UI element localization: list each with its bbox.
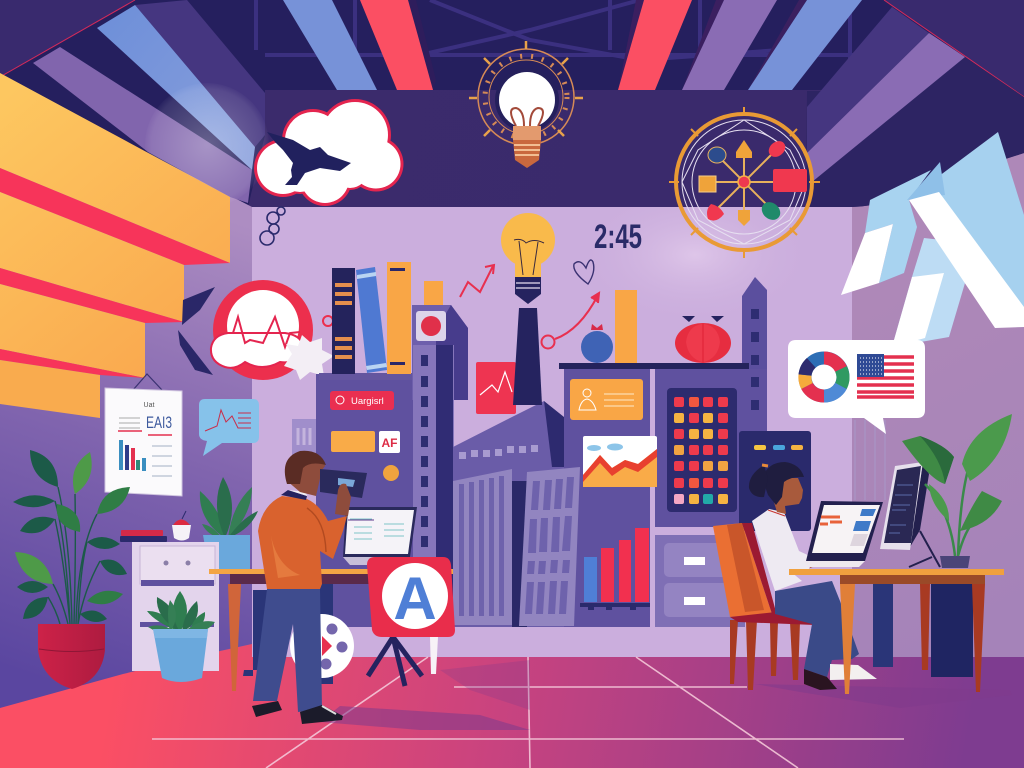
red chart pad [476,362,516,414]
navy gap under left beam [8,63,148,152]
chair [713,523,819,690]
books on cabinet [120,530,167,542]
icon: heart [574,260,594,284]
trend arrow [542,293,599,348]
right laptop [804,501,883,567]
man [252,451,367,724]
panel: shelf under books [319,373,413,380]
left wall [0,77,252,712]
beam: ceiling blue right [748,0,862,90]
red label pill: Uargisrl [351,396,384,407]
left desk [209,569,453,691]
red pot [38,624,105,689]
bar chart [580,528,650,610]
flag [857,354,914,398]
phone and hand [320,469,367,498]
cup [172,511,191,540]
big red circle with heartbeat cloud [211,280,313,380]
ceiling background [0,0,1024,210]
yellow tag with AF card: AF [382,436,398,450]
monitor [880,462,940,567]
sign with letter A: A [393,565,437,632]
lens glow [145,83,269,207]
small zigzag arrow [460,265,494,297]
film reel [290,614,354,678]
shelf with objects [559,290,749,369]
sign with letter A [367,557,455,686]
donut chart [805,358,843,396]
cloud with bird [254,99,404,206]
shoes [830,664,877,680]
back wall [252,185,855,659]
right wall [852,153,1024,670]
beam: left blue [97,5,255,170]
beam: right lilac [807,33,965,182]
right desk [789,569,1004,694]
floor [0,644,1024,768]
floor grid lines [152,657,904,768]
legs [253,589,322,712]
big plant [13,450,130,689]
blue chart bubble [199,399,259,456]
server panel [739,431,811,531]
legs [775,581,859,677]
curtain lines [855,420,885,500]
cabinet [132,542,219,671]
right tower [742,277,767,410]
arm and hand [809,548,832,568]
sweater [258,496,347,589]
tower building [412,305,468,627]
colored squares panel [667,388,737,512]
beam: ceiling purple right [682,0,777,90]
books [332,262,443,374]
ceiling band [248,90,885,207]
drawers [664,543,734,617]
right foreground building [519,467,580,626]
poster [105,374,182,496]
poster: EAI3 [146,413,172,432]
panel: right shelf block [564,369,767,627]
central buildings [453,401,579,627]
origami shapes [841,132,1024,347]
poster: Uat [144,402,154,409]
red label pill [330,391,394,410]
right ceiling dark area [806,57,1024,207]
navy diamonds [178,287,215,375]
yellow stepped panels [0,73,230,418]
white star badge [284,335,334,380]
floor shadows [320,660,1012,730]
top left corner panel [0,0,135,77]
right plant [902,414,1012,568]
orange dot [383,465,399,481]
head [286,452,325,496]
beam: ceiling red [360,0,436,90]
chain rings [260,207,285,245]
speech bubble with donut and flag [788,340,925,434]
head [772,478,803,514]
hair [762,462,804,505]
shirt [752,509,812,591]
bird silhouette [267,132,351,185]
shoes [252,701,282,717]
beam: ceiling red right [618,0,692,90]
beam: ceiling blue [283,0,377,90]
beam: left lilac [33,47,252,203]
beam: right dark purple [807,7,929,153]
beam: left dark purple [135,0,265,147]
back plant on cabinet [200,477,258,569]
icon: compass wheel [669,107,820,258]
panel: left building wall [292,374,413,627]
orange profile card [570,379,643,420]
small potted plant [147,591,215,682]
woman [749,462,877,690]
chimney and big lightbulb [501,213,555,405]
top right corner panel [884,0,1024,97]
red ring mark [323,316,333,326]
collar [281,490,307,500]
clock time: 2:45 [594,218,642,256]
left laptop [343,507,417,565]
icon: lightbulb gear [469,41,583,168]
yellow tag with AF card [331,431,400,453]
mountain chart card [583,436,657,487]
